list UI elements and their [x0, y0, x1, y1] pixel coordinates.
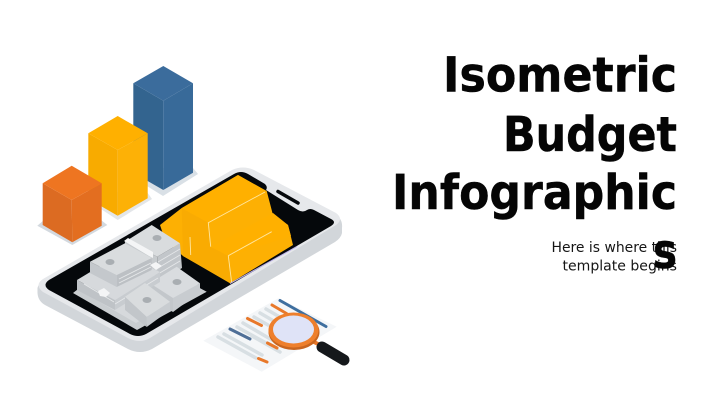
document sheet	[203, 298, 337, 372]
phone screen	[46, 172, 334, 336]
phone face	[38, 168, 340, 341]
magnifier lens	[268, 312, 320, 350]
gold: lower bar top face	[211, 213, 291, 256]
subtitle	[552, 240, 677, 274]
bar: yellow	[84, 116, 152, 220]
gold highlights	[190, 192, 272, 283]
money stacks	[73, 225, 207, 330]
money: back stack	[125, 225, 182, 283]
money: upper left stack	[90, 243, 152, 287]
gold base line	[230, 246, 297, 284]
money: right front stack	[150, 267, 200, 312]
bar: blue	[126, 66, 198, 196]
bar: orange	[37, 166, 107, 245]
money: base stack	[73, 268, 207, 330]
title	[392, 48, 677, 280]
gold bars	[160, 175, 297, 284]
title: Isometric	[443, 48, 677, 104]
bar chart	[37, 66, 198, 245]
magnifier handle	[314, 342, 344, 360]
money: middle stack	[77, 254, 160, 310]
subtitle: template begins	[562, 258, 677, 274]
gold: left face shade	[182, 208, 231, 283]
phone body side	[38, 169, 342, 352]
gold silhouette	[160, 175, 293, 283]
subtitle: Here is where this	[552, 240, 677, 256]
title: Budget	[503, 107, 677, 163]
gold: top bar top face	[182, 175, 266, 223]
document text lines	[218, 300, 326, 362]
document with magnifier	[203, 298, 344, 372]
phone	[38, 168, 342, 352]
money straps	[98, 238, 162, 297]
phone speaker	[278, 192, 298, 203]
money: front stack	[125, 283, 170, 327]
title: Infographic	[392, 165, 677, 221]
title: s	[653, 224, 677, 280]
